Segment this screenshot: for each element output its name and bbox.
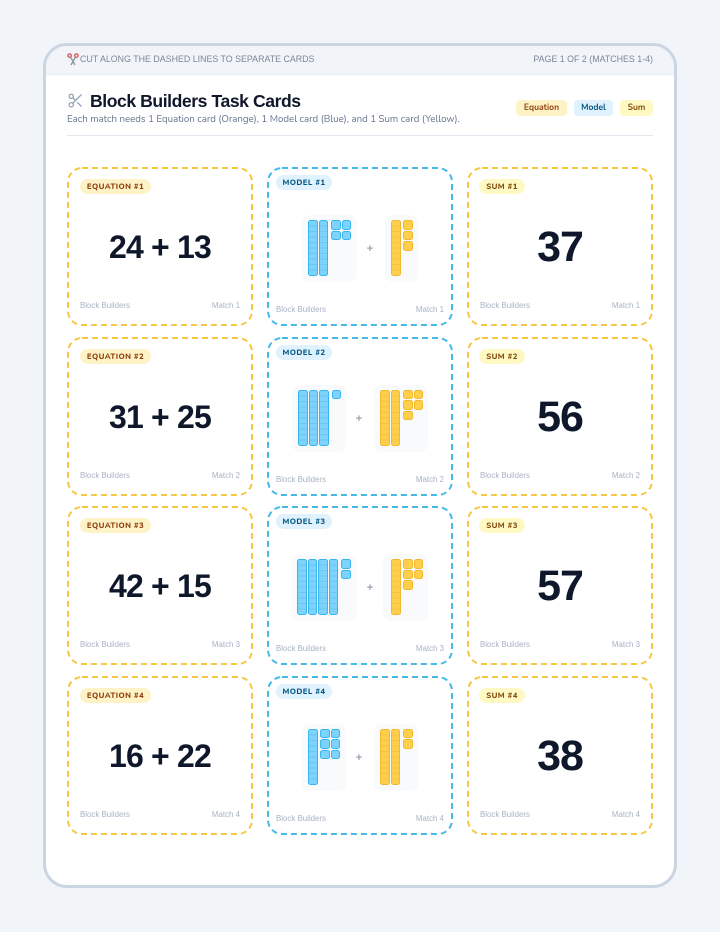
label	[276, 175, 332, 190]
label	[276, 514, 332, 529]
footer match: Match 4	[416, 814, 444, 822]
legend: equation	[516, 100, 567, 116]
footer brand: Block Builders	[80, 810, 130, 818]
footer match: Match 3	[612, 640, 640, 649]
footer match: Match 4	[212, 810, 240, 818]
footer brand: Block Builders	[276, 814, 326, 822]
label: SUM #4	[486, 690, 518, 700]
footer match: Match 2	[212, 470, 240, 480]
label: EQUATION #1	[87, 181, 144, 192]
label: MODEL #4	[282, 686, 326, 696]
footer match: Match 2	[416, 474, 444, 484]
equation: 31 + 25	[109, 398, 211, 434]
label	[80, 688, 151, 702]
sum card 4	[467, 676, 653, 834]
base-ten blocks: 31	[292, 384, 346, 452]
label	[479, 688, 525, 702]
sum: 37	[537, 223, 583, 271]
cut instruction text: CUT ALONG THE DASHED LINES TO SEPARATE CARDS	[80, 54, 314, 64]
legend: sum: Sum	[628, 102, 645, 114]
footer brand: Block Builders	[480, 470, 530, 480]
footer brand: Block Builders	[480, 810, 530, 818]
label	[276, 344, 332, 360]
base-ten blocks: 13	[385, 215, 418, 282]
label: SUM #1	[486, 181, 518, 192]
label	[479, 348, 525, 364]
footer match: Match 1	[212, 301, 240, 310]
footer match: Match 2	[612, 470, 640, 480]
label	[276, 684, 332, 698]
footer match: Match 3	[416, 644, 444, 653]
equation card 4	[67, 676, 253, 834]
footer brand: Block Builders	[276, 644, 326, 653]
icon: red scissors	[67, 53, 79, 66]
equation card 3	[67, 506, 253, 665]
label: MODEL #3	[282, 516, 326, 527]
footer brand: Block Builders	[276, 305, 326, 314]
plus sign: +	[356, 412, 362, 424]
title: Block Builders Task Cards	[90, 91, 301, 111]
sum card 1	[467, 167, 653, 326]
footer brand: Block Builders	[480, 301, 530, 310]
footer brand: Block Builders	[80, 470, 130, 480]
footer brand: Block Builders	[480, 640, 530, 649]
label	[479, 179, 525, 194]
legend: equation: Equation	[524, 102, 559, 114]
model card 2	[267, 336, 453, 496]
label	[80, 179, 151, 194]
legend: model	[574, 100, 613, 116]
base-ten blocks: 24	[302, 215, 357, 282]
equation card 1	[67, 167, 253, 326]
label: SUM #2	[486, 350, 518, 362]
footer match: Match 1	[416, 305, 444, 314]
sum: 38	[537, 732, 583, 780]
label	[80, 348, 151, 364]
footer brand: Block Builders	[276, 474, 326, 484]
model card 3	[267, 506, 453, 665]
sum: 56	[537, 392, 583, 440]
equation: 24 + 13	[109, 229, 211, 265]
footer match: Match 3	[212, 640, 240, 649]
base-ten blocks: 25	[374, 384, 428, 452]
base-ten blocks: 42	[291, 554, 357, 621]
base-ten blocks: 15	[383, 554, 428, 621]
model card 4	[267, 676, 453, 834]
footer match: Match 4	[612, 810, 640, 818]
page indicator: PAGE 1 OF 2 (MATCHES 1-4)	[533, 54, 653, 64]
cut instruction strip	[46, 46, 674, 75]
subtitle: Each match needs 1 Equation card (Orange), 1 Model card (Blue), and 1 Sum card (Yellow).	[67, 113, 460, 126]
sum card 2	[467, 336, 653, 496]
plus sign: +	[367, 582, 373, 594]
sum card 3	[467, 506, 653, 665]
label: EQUATION #3	[87, 520, 144, 531]
legend: model: Model	[581, 102, 606, 114]
base-ten blocks: 16	[302, 724, 346, 790]
label: EQUATION #4	[87, 690, 144, 700]
label	[479, 518, 525, 533]
legend: sum	[620, 100, 653, 116]
icon: grey scissors	[68, 94, 82, 108]
label: MODEL #2	[282, 346, 326, 358]
equation card 2	[67, 336, 253, 496]
footer brand: Block Builders	[80, 301, 130, 310]
equation: 42 + 15	[109, 568, 211, 604]
base-ten blocks: 22	[374, 724, 418, 790]
label: EQUATION #2	[87, 350, 144, 362]
plus sign: +	[356, 752, 362, 764]
equation: 16 + 22	[109, 738, 211, 774]
sum: 57	[537, 562, 583, 610]
label: MODEL #1	[282, 177, 326, 188]
plus sign: +	[367, 243, 373, 255]
footer brand: Block Builders	[80, 640, 130, 649]
label	[80, 518, 151, 533]
footer match: Match 1	[612, 301, 640, 310]
label: SUM #3	[486, 520, 518, 531]
worksheet sheet	[43, 43, 677, 888]
model card 1	[267, 167, 453, 326]
